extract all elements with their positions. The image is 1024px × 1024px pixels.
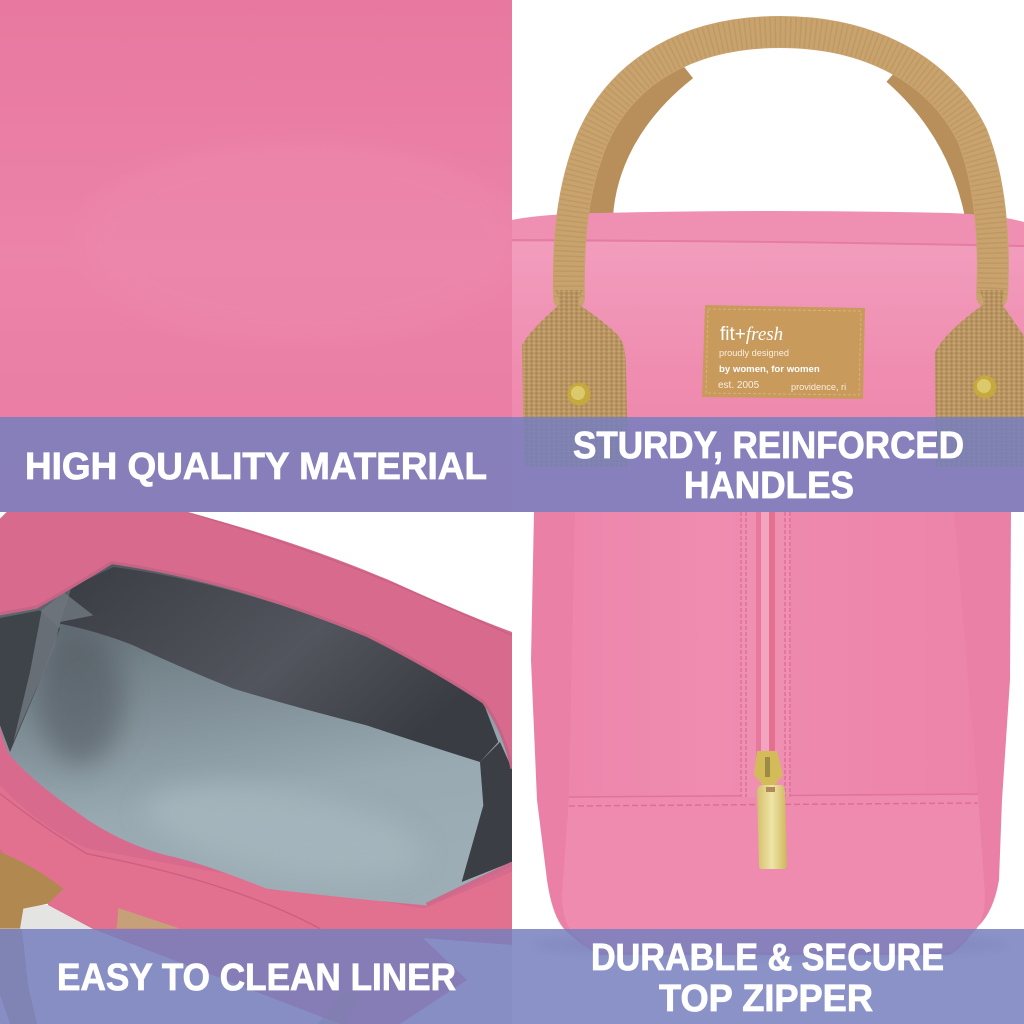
tan handle piece xyxy=(0,852,63,929)
interior opening xyxy=(0,564,512,905)
banner: durable and secure top zipper: TOP ZIPPER xyxy=(659,978,873,1020)
bag body xyxy=(531,512,1011,955)
panel: sturdy reinforced handles xyxy=(512,0,1024,512)
banner: sturdy reinforced handles xyxy=(512,417,1024,512)
brand label patch: providence, ri xyxy=(791,382,846,392)
zipper track xyxy=(740,512,790,797)
panel: easy to clean liner xyxy=(0,512,512,1024)
brand label patch: fit+fresh xyxy=(720,324,783,345)
right handle tab xyxy=(935,290,1024,467)
zipper lines xyxy=(0,563,512,769)
liner shading xyxy=(0,567,512,896)
left handle tab xyxy=(522,290,628,467)
bottom panel xyxy=(562,795,985,952)
brand label patch: by women, for women xyxy=(719,364,820,375)
floor shadow xyxy=(530,931,1010,959)
banner: high quality material: HIGH QUALITY MATERIAL xyxy=(25,446,487,488)
banner: durable and secure top zipper: DURABLE & SECURE xyxy=(591,937,944,979)
back wall liner xyxy=(60,567,498,762)
padded pink bag rim xyxy=(0,512,512,929)
grey backdrop behind bag xyxy=(0,905,92,929)
pink bag visible under banner xyxy=(48,900,512,1024)
gold zipper pull xyxy=(754,751,787,869)
brand label patch: est. 2005 xyxy=(718,380,760,391)
left wall liner xyxy=(0,610,60,752)
banner: sturdy reinforced handles: HANDLES xyxy=(684,465,854,507)
brand label patch: proudly designed xyxy=(719,348,789,358)
label on bag side xyxy=(117,908,180,929)
banner: high quality material xyxy=(0,417,512,512)
right wall liner xyxy=(462,742,512,882)
banner: easy to clean liner: EASY TO CLEAN LINER xyxy=(57,957,456,999)
banner: sturdy reinforced handles: STURDY, REINFORCED xyxy=(573,425,964,467)
panel: high quality material fabric swatch xyxy=(0,0,520,512)
banner: durable and secure top zipper xyxy=(512,929,1024,1024)
padded rim seams xyxy=(0,794,320,929)
brand label patch xyxy=(702,305,865,399)
bag top body xyxy=(512,211,1024,512)
rear handle strands xyxy=(600,68,978,216)
handle arc xyxy=(569,32,993,297)
panel: durable and secure top zipper xyxy=(512,512,1024,1024)
banner: easy to clean liner xyxy=(0,929,512,1024)
